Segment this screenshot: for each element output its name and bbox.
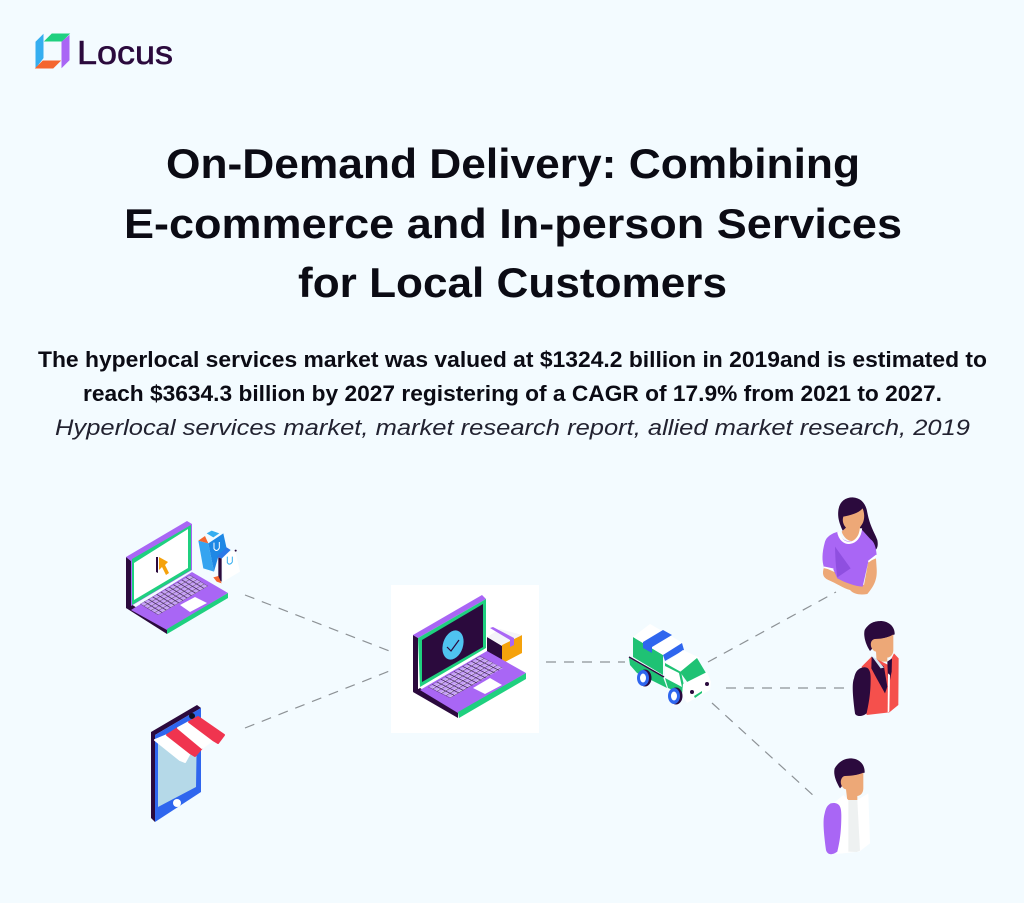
title: E-commerce and In-person Services bbox=[124, 200, 902, 247]
text block: market statistic: reach $3634.3 billion by 2027 registering of a CAGR of 17.9% from 2021 to 2027. bbox=[83, 381, 942, 406]
icon: laptop with order confirmed bbox=[413, 595, 526, 718]
text block: market statistic: Hyperlocal services market, market research report, allied market research, 2019 bbox=[55, 415, 971, 440]
logo: Locus: Locus bbox=[77, 34, 173, 71]
icon: phone storefront bbox=[151, 705, 224, 822]
title: On-Demand Delivery: Combining bbox=[166, 140, 860, 187]
icon: customer man in white vest bbox=[824, 758, 870, 854]
icon: customer woman bbox=[822, 497, 878, 594]
panel: central white card bbox=[391, 585, 539, 733]
text block: market statistic: The hyperlocal services market was valued at $1324.2 billion in 2019and is estimated to bbox=[38, 347, 987, 372]
title bbox=[124, 140, 902, 306]
icon: delivery truck bbox=[629, 624, 711, 704]
logo: Locus bbox=[36, 34, 173, 71]
text block: market statistic bbox=[38, 347, 987, 440]
icon: laptop with shopping bags bbox=[126, 521, 240, 634]
title: for Local Customers bbox=[298, 259, 727, 306]
icon: customer man in red vest bbox=[853, 621, 899, 716]
connector lines bbox=[245, 592, 845, 797]
